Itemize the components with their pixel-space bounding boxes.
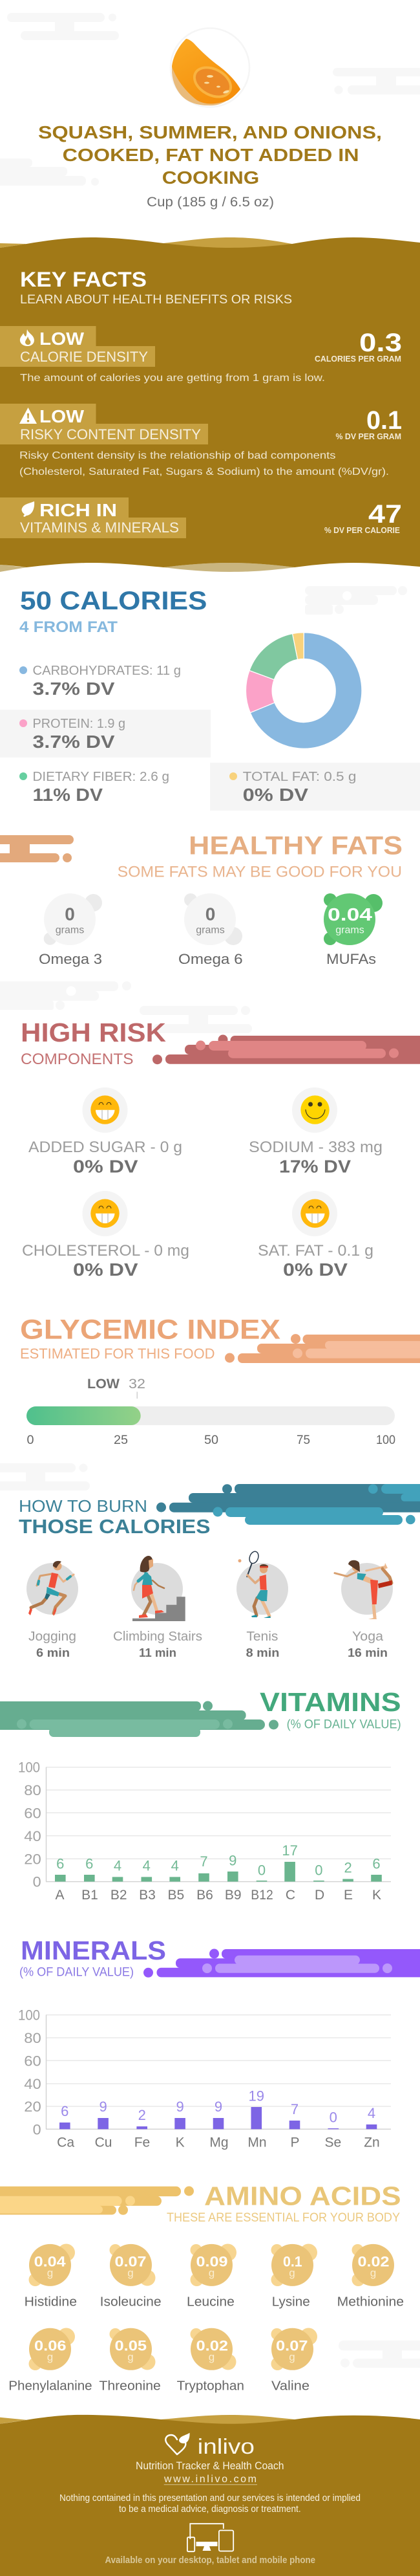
risk item: added sugar: ADDED SUGAR - 0 g [28, 1139, 182, 1156]
risk item: sodium: SODIUM - 383 mg [249, 1139, 383, 1156]
heading: minerals: MINERALS [21, 1936, 166, 1965]
bar chart: minerals: Mn [247, 2135, 267, 2150]
title [38, 122, 382, 188]
fact: rich in vitamins and minerals: VITAMINS & MINERALS [20, 519, 179, 536]
fact: rich in vitamins and minerals: RICH IN [39, 500, 117, 520]
legend: carbohydrates [19, 664, 181, 699]
amino: phenylalanine [8, 2328, 92, 2393]
logo: inlivo [165, 2433, 255, 2458]
heading: amino acids: AMINO ACIDS [204, 2181, 401, 2210]
activity label: yoga [348, 1630, 388, 1659]
bar chart: vitamins: 0 [315, 1862, 323, 1878]
amino: valine [271, 2328, 317, 2393]
legend: carbohydrates: 3.7% DV [32, 679, 115, 699]
amino: valine: 0.07 [276, 2338, 308, 2354]
bar chart: vitamins: B5 [168, 1888, 184, 1903]
bar chart: minerals: P [290, 2135, 300, 2150]
amino: methionine: 0.02 [358, 2254, 389, 2270]
amino: isoleucine: Isoleucine [100, 2294, 162, 2309]
legend: total fat [229, 770, 356, 805]
fact: calorie density [0, 326, 402, 384]
amino: threonine: g [127, 2351, 134, 2363]
fat: omega 3: 0 [65, 904, 75, 924]
legend: dietary fiber [19, 770, 169, 805]
heading: THOSE CALORIES [19, 1515, 211, 1538]
activity label: climbing stairs [113, 1630, 202, 1659]
bar chart: minerals: 100 [18, 2007, 40, 2024]
risk item: added sugar: 0% DV [73, 1157, 138, 1176]
activity: jogging [26, 1561, 78, 1616]
ribbon: vitamins [0, 1701, 278, 1737]
panel: key facts [0, 237, 420, 572]
fact: risky content density: RISKY CONTENT DENSITY [20, 426, 201, 442]
amino: leucine: 0.09 [196, 2254, 227, 2270]
activity label: tennis: Tenis [246, 1630, 278, 1644]
amino: leucine: Leucine [187, 2294, 235, 2309]
fact: rich in vitamins and minerals: 47 [368, 500, 402, 529]
bar chart: vitamins: 80 [24, 1782, 41, 1798]
bar chart: vitamins: 0 [33, 1874, 41, 1890]
fat: omega 6 [178, 893, 243, 967]
heading: calories: 50 CALORIES [20, 587, 207, 615]
bar chart: minerals: Zn [364, 2135, 380, 2150]
fat: omega 6: Omega 6 [178, 951, 243, 967]
heading: healthy fats: HEALTHY FATS [189, 832, 403, 860]
amino: threonine: 0.05 [115, 2338, 147, 2354]
title: COOKING [162, 168, 259, 188]
bar chart: minerals: 80 [24, 2030, 41, 2046]
heading [19, 1496, 211, 1538]
subheading: components: COMPONENTS [21, 1051, 133, 1068]
bar chart: minerals: 0 [330, 2110, 337, 2126]
availability note: Available on your desktop, tablet and mobile phone [105, 2555, 315, 2566]
fat: omega 6: 0 [205, 904, 215, 924]
tagline: Nutrition Tracker & Health Coach [136, 2460, 284, 2472]
amino: lysine: g [289, 2267, 295, 2279]
bar chart: vitamins: 6 [372, 1855, 381, 1872]
bar chart: minerals: 6 [61, 2103, 68, 2119]
panel: healthy fats [0, 832, 403, 967]
bar chart: minerals: Ca [57, 2135, 74, 2150]
bar chart: minerals: 60 [24, 2053, 41, 2069]
legend: dietary fiber: 11% DV [32, 785, 103, 805]
bar chart: vitamins: 60 [24, 1805, 41, 1821]
amino: tryptophan [177, 2328, 244, 2393]
amino: histidine: g [47, 2267, 53, 2279]
amino: methionine: g [370, 2267, 376, 2279]
serving size: Cup (185 g / 6.5 oz) [147, 195, 274, 210]
panel: minerals [18, 1936, 420, 2150]
donut chart [246, 633, 362, 748]
ribbon: burn calories [156, 1484, 420, 1525]
amino: histidine: 0.04 [34, 2254, 67, 2270]
legend: protein [19, 717, 125, 752]
risk item: cholesterol: 0% DV [73, 1260, 138, 1280]
bar chart: vitamins: 0 [258, 1862, 266, 1878]
bar chart: minerals: 20 [24, 2099, 41, 2115]
bar chart: vitamins [18, 1760, 391, 1903]
fact: risky content density: 0.1 [366, 406, 402, 435]
bar chart: vitamins: 4 [114, 1858, 121, 1874]
fact: calorie density: 0.3 [359, 329, 402, 357]
gauge axis: 0 [27, 1434, 34, 1447]
gauge axis: 25 [114, 1434, 128, 1447]
panel: glycemic index [20, 1315, 420, 1447]
bar chart: vitamins: E [344, 1888, 353, 1903]
fact: calorie density: LOW [39, 329, 85, 349]
gauge value [87, 1377, 145, 1399]
fact: risky content density: % DV PER GRAM [336, 432, 401, 441]
subheading: (% OF DAILY VALUE) [19, 1965, 134, 1980]
activity label: yoga: 16 min [348, 1646, 388, 1659]
icon: warning triangle [19, 408, 37, 424]
website link: www.inlivo.com [163, 2474, 257, 2485]
subheading: THESE ARE ESSENTIAL FOR YOUR BODY [167, 2211, 400, 2225]
activity label: climbing stairs: Climbing Stairs [113, 1630, 202, 1644]
bar chart: vitamins: 2 [344, 1859, 352, 1875]
amino: leucine [187, 2243, 236, 2309]
amino: isoleucine: 0.07 [115, 2254, 146, 2270]
panel: calories [0, 587, 420, 811]
bar chart: minerals: 40 [24, 2076, 41, 2092]
fact: risky content density: (Cholesterol, Saturated Fat, Sugars & Sodium) to the amount (%DV/gr). [19, 466, 389, 477]
amino: threonine [99, 2328, 161, 2393]
title: SQUASH, SUMMER, AND ONIONS, [38, 122, 382, 142]
bar chart: vitamins: B6 [196, 1888, 213, 1903]
panel: vitamins [0, 1687, 401, 1903]
amino: tryptophan: Tryptophan [177, 2378, 244, 2393]
heading: key facts: KEY FACTS [20, 268, 147, 291]
fact: risky content density: Risky Content density is the relationship of bad components [19, 450, 336, 461]
disclaimer [59, 2493, 361, 2515]
amino: leucine: g [209, 2267, 215, 2279]
fact: risky content density [0, 404, 402, 477]
amino: tryptophan: 0.02 [196, 2338, 228, 2354]
bar chart: vitamins: B2 [110, 1888, 127, 1903]
amino: histidine [25, 2243, 77, 2309]
panel: high risk components [21, 1018, 420, 1280]
bar chart: vitamins: 6 [85, 1855, 93, 1872]
logo: inlivo: inlivo [198, 2434, 255, 2458]
amino: valine: g [289, 2351, 295, 2363]
bar chart: vitamins: 17 [282, 1842, 298, 1859]
legend: total fat: 0% DV [243, 785, 308, 805]
fat: omega 6: grams [196, 925, 225, 936]
risk item: cholesterol: CHOLESTEROL - 0 mg [22, 1242, 189, 1260]
bar chart: vitamins: 20 [24, 1851, 41, 1867]
activity label: tennis [246, 1630, 279, 1659]
legend: total fat: TOTAL FAT: 0.5 g [243, 770, 356, 784]
activity label: climbing stairs: 11 min [139, 1646, 176, 1659]
bar chart: vitamins: 7 [200, 1853, 208, 1870]
ribbon: healthy fats [0, 835, 74, 862]
legend: protein: 3.7% DV [32, 732, 115, 752]
risk item: saturated fat [258, 1191, 373, 1280]
amino: isoleucine: g [127, 2267, 134, 2279]
icon: flame [20, 329, 34, 346]
fat: omega 3: grams [56, 925, 84, 936]
panel: how to burn those calories [19, 1484, 420, 1659]
risk item: saturated fat: 0% DV [283, 1260, 348, 1280]
fact: rich in vitamins and minerals [0, 497, 402, 538]
bar chart: minerals: Se [324, 2135, 341, 2150]
activity: yoga [335, 1560, 393, 1619]
bar chart: vitamins: 4 [171, 1858, 179, 1874]
bar chart: minerals: 9 [99, 2099, 107, 2115]
gauge axis: 75 [297, 1434, 310, 1447]
amino: tryptophan: g [209, 2351, 215, 2363]
bar chart: vitamins: K [372, 1888, 381, 1903]
heading: HOW TO BURN [19, 1496, 147, 1516]
activity label: jogging: Jogging [28, 1630, 76, 1644]
legend: protein: PROTEIN: 1.9 g [32, 717, 125, 731]
icon: leaf [22, 501, 34, 517]
heading: high risk: HIGH RISK [21, 1018, 166, 1047]
risk item: saturated fat: SAT. FAT - 0.1 g [258, 1242, 373, 1260]
bar chart: vitamins: D [315, 1888, 324, 1903]
activity label: tennis: 8 min [246, 1646, 279, 1659]
fact: calorie density: CALORIES PER GRAM [315, 355, 401, 364]
amino: threonine: Threonine [99, 2378, 161, 2393]
fat: mufas [324, 893, 383, 967]
bar chart: minerals: K [176, 2135, 185, 2150]
bar chart: minerals [18, 2007, 391, 2150]
bar chart: minerals: 4 [368, 2105, 375, 2121]
risk item: sodium: 17% DV [279, 1157, 351, 1176]
activity: climbing stairs [131, 1556, 185, 1621]
bar chart: vitamins: C [286, 1888, 295, 1903]
bar chart: minerals: Cu [95, 2135, 112, 2150]
legend: dietary fiber: DIETARY FIBER: 2.6 g [32, 770, 169, 784]
fact: risky content density: LOW [39, 406, 85, 426]
icon: squash in circle [171, 28, 249, 107]
gauge value: LOW [87, 1377, 120, 1392]
bar chart: minerals: 0 [33, 2121, 41, 2137]
bar chart: vitamins: 9 [229, 1852, 236, 1868]
fat: mufas: 0.04 [328, 904, 373, 924]
gauge axis: 50 [204, 1434, 218, 1447]
bar chart: vitamins: 40 [24, 1828, 41, 1844]
fact: calorie density: CALORIE DENSITY [20, 349, 148, 365]
amino: histidine: Histidine [25, 2294, 77, 2309]
ribbon: glycemic index [225, 1334, 420, 1363]
amino: lysine: Lysine [272, 2294, 310, 2309]
ribbon: amino acids [0, 2187, 194, 2215]
fact: calorie density: The amount of calories you are getting from 1 gram is low. [20, 373, 325, 384]
gauge axis: 100 [376, 1434, 395, 1447]
bar chart: vitamins: B12 [251, 1888, 273, 1903]
bar chart: vitamins: B1 [81, 1888, 98, 1903]
legend: carbohydrates: CARBOHYDRATES: 11 g [32, 664, 181, 678]
subheading: SOME FATS MAY BE GOOD FOR YOU [118, 864, 402, 881]
risk item: cholesterol [22, 1191, 189, 1280]
amino: valine: Valine [271, 2378, 310, 2393]
title: COOKED, FAT NOT ADDED IN [63, 145, 359, 165]
gauge axis [27, 1434, 395, 1447]
activity label: yoga: Yoga [352, 1630, 384, 1644]
panel: footer [0, 2415, 420, 2576]
amino: methionine [337, 2244, 404, 2309]
amino: lysine [271, 2243, 317, 2309]
fat: mufas: MUFAs [326, 951, 376, 967]
fat: mufas: grams [335, 925, 364, 936]
bar chart: minerals: 19 [249, 2088, 264, 2104]
bar chart: minerals: Fe [134, 2135, 150, 2150]
subheading: LEARN ABOUT HEALTH BENEFITS OR RISKS [20, 292, 292, 307]
disclaimer: to be a medical advice, diagnosis or treatment. [119, 2504, 301, 2515]
bar chart: minerals: 9 [176, 2099, 184, 2115]
amino: phenylalanine: 0.06 [34, 2338, 66, 2354]
ribbon: minerals [143, 1948, 420, 1978]
heading: glycemic index: GLYCEMIC INDEX [20, 1315, 280, 1346]
activity: tennis [236, 1550, 288, 1618]
activity label: jogging [28, 1630, 76, 1659]
fat: omega 3 [39, 893, 102, 967]
amino: isoleucine [100, 2244, 162, 2309]
gauge bar [26, 1406, 395, 1425]
bar chart: vitamins: B9 [225, 1888, 242, 1903]
bar chart: vitamins: 100 [18, 1760, 40, 1775]
bar chart: minerals: 7 [291, 2101, 299, 2117]
amino: lysine: 0.1 [283, 2254, 302, 2270]
risk item: sodium [249, 1087, 383, 1176]
amino: phenylalanine: g [47, 2351, 53, 2363]
panel: amino acids [0, 2181, 404, 2393]
bar chart: minerals: 2 [138, 2107, 146, 2123]
bar chart: minerals: 9 [215, 2099, 222, 2115]
bar chart: vitamins: A [55, 1888, 65, 1903]
subheading: ESTIMATED FOR THIS FOOD [20, 1346, 215, 1362]
icon: devices [187, 2524, 233, 2551]
bar chart: minerals: Mg [209, 2135, 229, 2150]
risk item: added sugar [28, 1087, 182, 1176]
bar chart: vitamins: B3 [139, 1888, 156, 1903]
fat: omega 3: Omega 3 [39, 951, 102, 967]
bar chart: vitamins: 6 [56, 1855, 64, 1872]
amino: phenylalanine: Phenylalanine [8, 2378, 92, 2393]
activity label: jogging: 6 min [36, 1646, 70, 1659]
ribbon: high risk [152, 1035, 420, 1064]
disclaimer: Nothing contained in this presentation and our services is intended or implied [59, 2493, 361, 2504]
subheading: from fat: 4 FROM FAT [19, 618, 118, 636]
amino: methionine: Methionine [337, 2294, 404, 2309]
gauge value: 32 [129, 1377, 145, 1392]
heading: vitamins: VITAMINS [260, 1687, 401, 1717]
subheading: (% OF DAILY VALUE) [287, 1718, 401, 1732]
fact: rich in vitamins and minerals: % DV PER CALORIE [324, 526, 400, 535]
bar chart: vitamins: 4 [143, 1858, 151, 1874]
